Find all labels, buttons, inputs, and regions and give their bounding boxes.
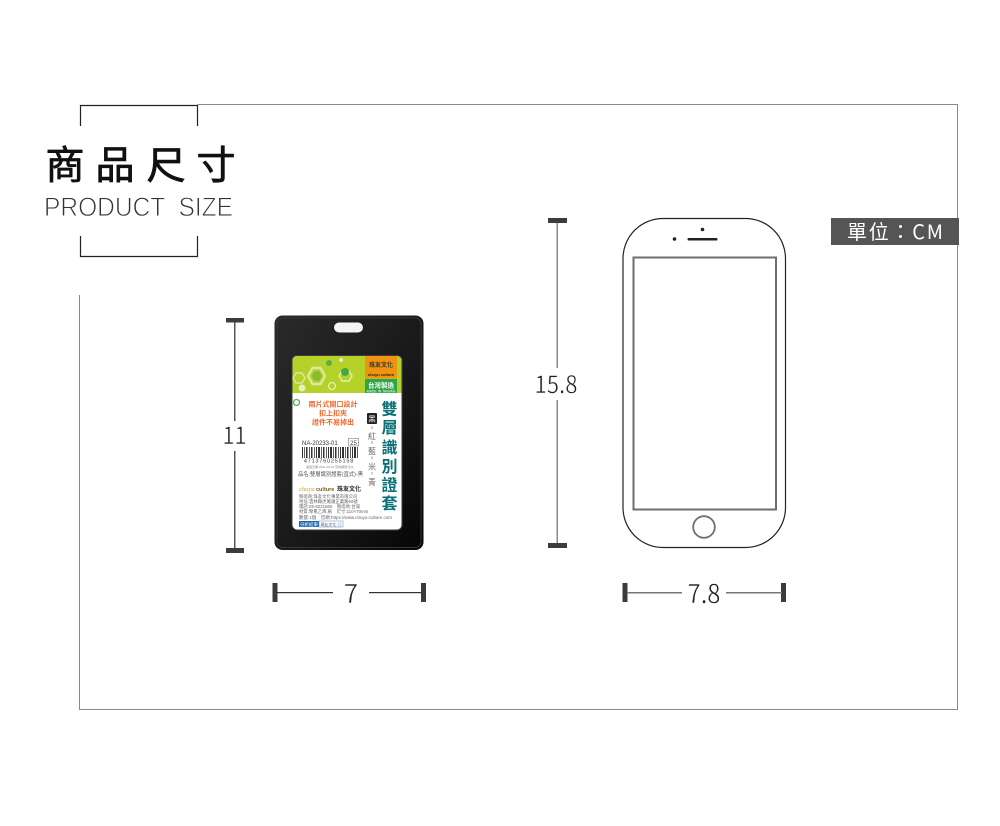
colour options: 藍 (368, 446, 376, 456)
home button (693, 516, 715, 538)
title block (44, 106, 236, 256)
height dimension: 15.8: 15.8 (534, 365, 578, 400)
colour options: 紅 (368, 431, 376, 441)
card insert: 製造日期:2021-03-02 有效期限:永久 (306, 464, 354, 469)
card insert: MADE IN TAIWAN (367, 389, 396, 393)
width dimension: 7 (272, 574, 426, 611)
manufacturer details: 材質:聚氯乙烯,紙 尺寸:110×70mm (299, 508, 369, 515)
title: Chinese heading: 商 (45, 135, 85, 191)
barcode (302, 447, 358, 458)
green banner (292, 356, 402, 393)
phone body (623, 218, 786, 548)
vertical product name: 層 (381, 419, 398, 437)
hole ring icon (294, 400, 300, 406)
manufacturer details: 電話:05-6221666 製造地:台灣 (299, 503, 361, 510)
lanyard slot (334, 322, 363, 332)
card insert: 25 (350, 441, 357, 447)
card insert: 珠友文化 ◎ (320, 521, 342, 527)
title: Chinese heading (45, 135, 236, 191)
colour options (367, 413, 377, 487)
height dimension: 11 (218, 318, 252, 553)
brand line: chuyu (299, 486, 315, 493)
card insert: 珠友文化 (369, 361, 393, 369)
width dimension: 7.8 (622, 574, 786, 611)
speaker (688, 238, 718, 240)
card insert: chuyu culture (368, 372, 395, 377)
product code: NA-20233-01 (302, 441, 338, 447)
vertical product name: 證 (381, 476, 398, 494)
holder body (274, 316, 424, 550)
vertical product name: 識 (381, 438, 398, 457)
manufacturer details: 地址:雲林縣虎尾鎮正義路66號 (299, 498, 358, 505)
outer frame (80, 104, 958, 710)
orange feature text: 兩片式開口設計 (308, 400, 358, 408)
unit label: 單位：CM (847, 216, 943, 245)
height dimension: 15.8 (530, 218, 584, 548)
card insert (292, 356, 402, 530)
width dimension: 7: 7 (344, 574, 358, 611)
card insert: 分析結果 (300, 521, 318, 528)
title: Chinese heading: 寸 (196, 135, 236, 191)
height dimension: 11: 11 (222, 416, 246, 451)
vertical product name: 套 (381, 495, 398, 513)
colour options: 黑 (368, 414, 376, 424)
front camera (673, 237, 676, 241)
title: English heading: PRODUCT SIZE (44, 192, 233, 222)
manufacturer details: 數量:1個 官網:https://www.chuyu-culture.com (299, 514, 392, 521)
card insert: 4713760255158 (304, 458, 354, 464)
title: Chinese heading: 尺 (146, 135, 186, 191)
manufacturer details (299, 493, 392, 521)
card insert: 珠友文化 (337, 485, 361, 493)
blue badges (299, 521, 319, 527)
sensor dot (701, 228, 704, 231)
vertical product name (381, 400, 398, 513)
title bracket (80, 106, 198, 256)
card insert: 品名:雙層識別證套(直式)-黑 (298, 470, 363, 478)
card insert: culture (316, 487, 334, 493)
width dimension: 7.8: 7.8 (688, 574, 720, 611)
vertical product name: 別 (381, 458, 398, 476)
title: Chinese heading: 品 (95, 135, 135, 191)
colour options: 米 (368, 462, 376, 472)
orange feature text (308, 400, 358, 426)
orange feature text: 證件不易掉出 (312, 418, 354, 426)
orange feature text: 扣上扣夾 (319, 408, 347, 418)
brand orange tag (365, 356, 397, 378)
made in Taiwan tag (365, 379, 397, 393)
phone screen (634, 258, 776, 510)
smartphone outline (623, 218, 786, 548)
hexagon pattern (293, 358, 352, 392)
colour options: 青 (368, 477, 376, 487)
product: black ID card holder (274, 316, 424, 550)
manufacturer details: 製造商:珠友文化事業有限公司 (299, 493, 357, 500)
card insert: 台灣製造 (368, 380, 394, 390)
vertical product name: 雙 (381, 400, 398, 418)
